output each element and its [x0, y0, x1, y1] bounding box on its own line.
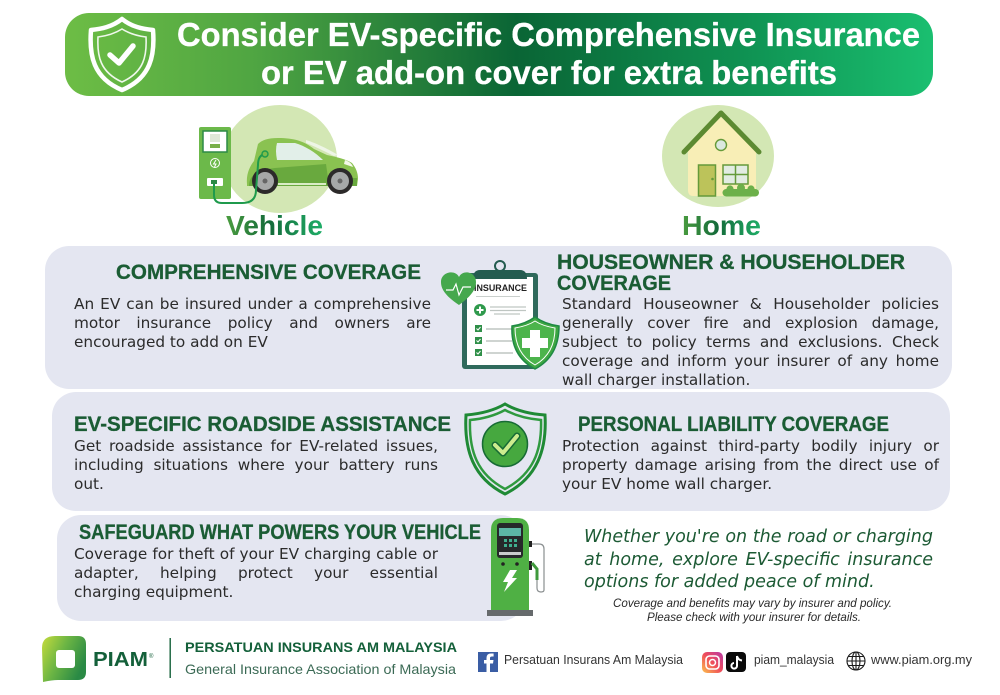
text: comprehensive coverage: encouraged to add on EV	[74, 333, 268, 351]
footer: facebook: Persatuan Insurans Am Malaysia	[504, 653, 683, 667]
text: houseowner coverage: Standard Houseowner & Householder policies	[562, 295, 939, 313]
charging station	[199, 127, 231, 199]
icon: shield with check	[464, 402, 547, 496]
text: safeguard: charging equipment.	[74, 583, 233, 601]
disclaimer	[613, 596, 892, 624]
heart with pulse	[441, 272, 476, 305]
icon: insurance clipboard: INSURANCE	[474, 283, 527, 294]
logo: PIAM: ®	[149, 653, 154, 660]
text: roadside assistance	[74, 437, 438, 493]
text: personal liability: Protection against third-party bodily injury or	[562, 437, 939, 455]
icon: charging pump	[487, 518, 545, 616]
charging cable	[214, 154, 265, 203]
text: houseowner coverage: generally cover fire and explosion damage,	[562, 314, 939, 332]
closing message	[584, 527, 933, 592]
title text	[177, 16, 920, 91]
panel: safeguard charging equipment	[57, 515, 525, 621]
car	[247, 138, 358, 194]
logo: PIAM: PERSATUAN INSURANS AM MALAYSIA	[185, 639, 457, 655]
text: roadside assistance: out.	[74, 475, 104, 493]
text: personal liability: your EV home wall charger.	[562, 475, 772, 493]
panel: comprehensive and houseowner coverage	[45, 246, 952, 389]
text: houseowner coverage: subject to policy terms and exclusions. Check	[562, 333, 939, 351]
icon: shield with check	[91, 19, 153, 90]
title banner	[65, 13, 933, 96]
panel: roadside assistance and personal liability	[52, 392, 950, 511]
text: safeguard: adapter, helping protect your essential	[74, 564, 438, 582]
footer: facebook	[478, 652, 683, 672]
closing message: options for added peace of mind.	[584, 572, 875, 592]
text: houseowner coverage: wall charger installation.	[562, 371, 750, 389]
text: personal liability	[562, 437, 940, 493]
disclaimer: Please check with your insurer for details.	[647, 610, 861, 624]
heading: safeguard what powers your vehicle: SAFEGUARD WHAT POWERS YOUR VEHICLE	[79, 521, 481, 544]
footer: instagram and tiktok	[702, 652, 834, 673]
text: safeguard: Coverage for theft of your EV charging cable or	[74, 545, 438, 563]
logo: PIAM: General Insurance Association of Malaysia	[185, 661, 456, 677]
text: roadside assistance: Get roadside assistance for EV-related issues,	[74, 437, 438, 455]
text: comprehensive coverage	[74, 295, 431, 351]
heading: houseowner and householder coverage: COVERAGE	[557, 272, 671, 295]
footer: instagram and tiktok: piam_malaysia	[754, 653, 834, 667]
logo wordmark: PIAM	[93, 648, 148, 671]
text: houseowner coverage: coverage and inform your insurer of any home	[562, 352, 939, 370]
green shield with cross	[512, 317, 559, 369]
text: houseowner coverage	[562, 295, 939, 389]
heading: Vehicle: Vehicle	[226, 210, 323, 241]
closing message: at home, explore EV-specific insurance	[584, 550, 933, 570]
text: safeguard	[74, 545, 438, 601]
disclaimer: Coverage and benefits may vary by insurer and policy.	[613, 596, 892, 610]
heading: comprehensive coverage: COMPREHENSIVE COVERAGE	[116, 261, 421, 284]
heading: Home: Home	[682, 210, 761, 241]
heading: personal liability coverage: PERSONAL LIABILITY COVERAGE	[578, 413, 889, 436]
footer: website: www.piam.org.my	[870, 653, 973, 667]
text: roadside assistance: including situations where your battery runs	[74, 456, 438, 474]
heading: EV-specific roadside assistance: EV-SPECIFIC ROADSIDE ASSISTANCE	[74, 413, 451, 436]
title text: Consider EV-specific Comprehensive Insurance	[177, 16, 920, 53]
text: comprehensive coverage: motor insurance policy and owners are	[74, 314, 431, 332]
heading: houseowner and householder coverage: HOUSEOWNER & HOUSEHOLDER	[557, 251, 905, 274]
text: personal liability: property damage arising from the direct use of	[562, 456, 939, 474]
heading: houseowner and householder coverage	[557, 251, 905, 295]
footer: website	[846, 652, 973, 670]
icon: insurance clipboard	[441, 260, 560, 370]
text: comprehensive coverage: An EV can be insured under a comprehensive	[74, 295, 431, 313]
closing message: Whether you're on the road or charging	[584, 527, 933, 547]
title text: or EV add-on cover for extra benefits	[261, 54, 837, 91]
icon: EV charger and car	[199, 105, 358, 213]
icon: house	[662, 105, 774, 207]
logo: PIAM	[42, 636, 457, 682]
